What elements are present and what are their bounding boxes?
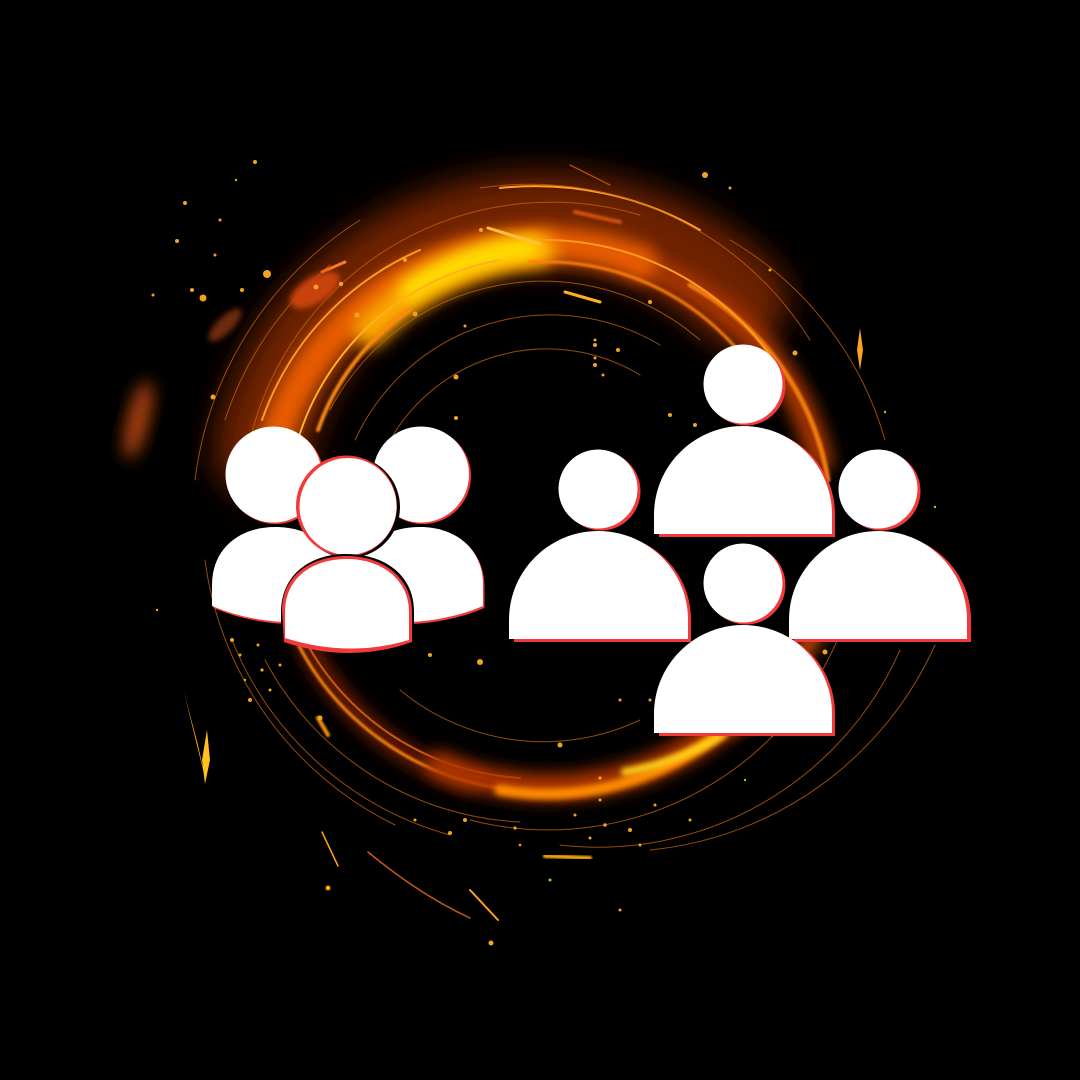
back left person (212, 426, 342, 624)
ring left lower glow (292, 610, 470, 782)
fiery ring (195, 165, 935, 920)
side flare (204, 304, 246, 346)
ring glow: wide upper haze (262, 220, 740, 450)
ember particles (152, 160, 936, 946)
person icon: top (654, 344, 835, 537)
ring bottom glow (440, 690, 760, 787)
ring lower strands (296, 640, 500, 788)
ring bottom hot spot (625, 735, 722, 772)
streaks (318, 165, 620, 920)
left glow smear (118, 379, 158, 461)
ring lower right glow (730, 590, 835, 725)
back right person (355, 426, 484, 624)
person icon: bottom (654, 544, 835, 736)
upper left flare (284, 264, 346, 316)
front person (281, 456, 414, 660)
ring right edge (690, 285, 828, 480)
ring core: yellow hot spot (370, 250, 540, 330)
person icon: right (789, 450, 971, 642)
group icon: three people (212, 426, 484, 660)
ring bottom core (500, 725, 730, 794)
person icon: left (509, 450, 691, 642)
ring core: upper orange band (275, 244, 640, 440)
tapered flares (184, 328, 863, 784)
ring right strands (540, 240, 780, 370)
ring left strands (262, 250, 420, 420)
thin orbit lines (195, 184, 935, 850)
ring core: brightest spot (410, 248, 530, 290)
ring glow: upper right arc (640, 265, 820, 460)
